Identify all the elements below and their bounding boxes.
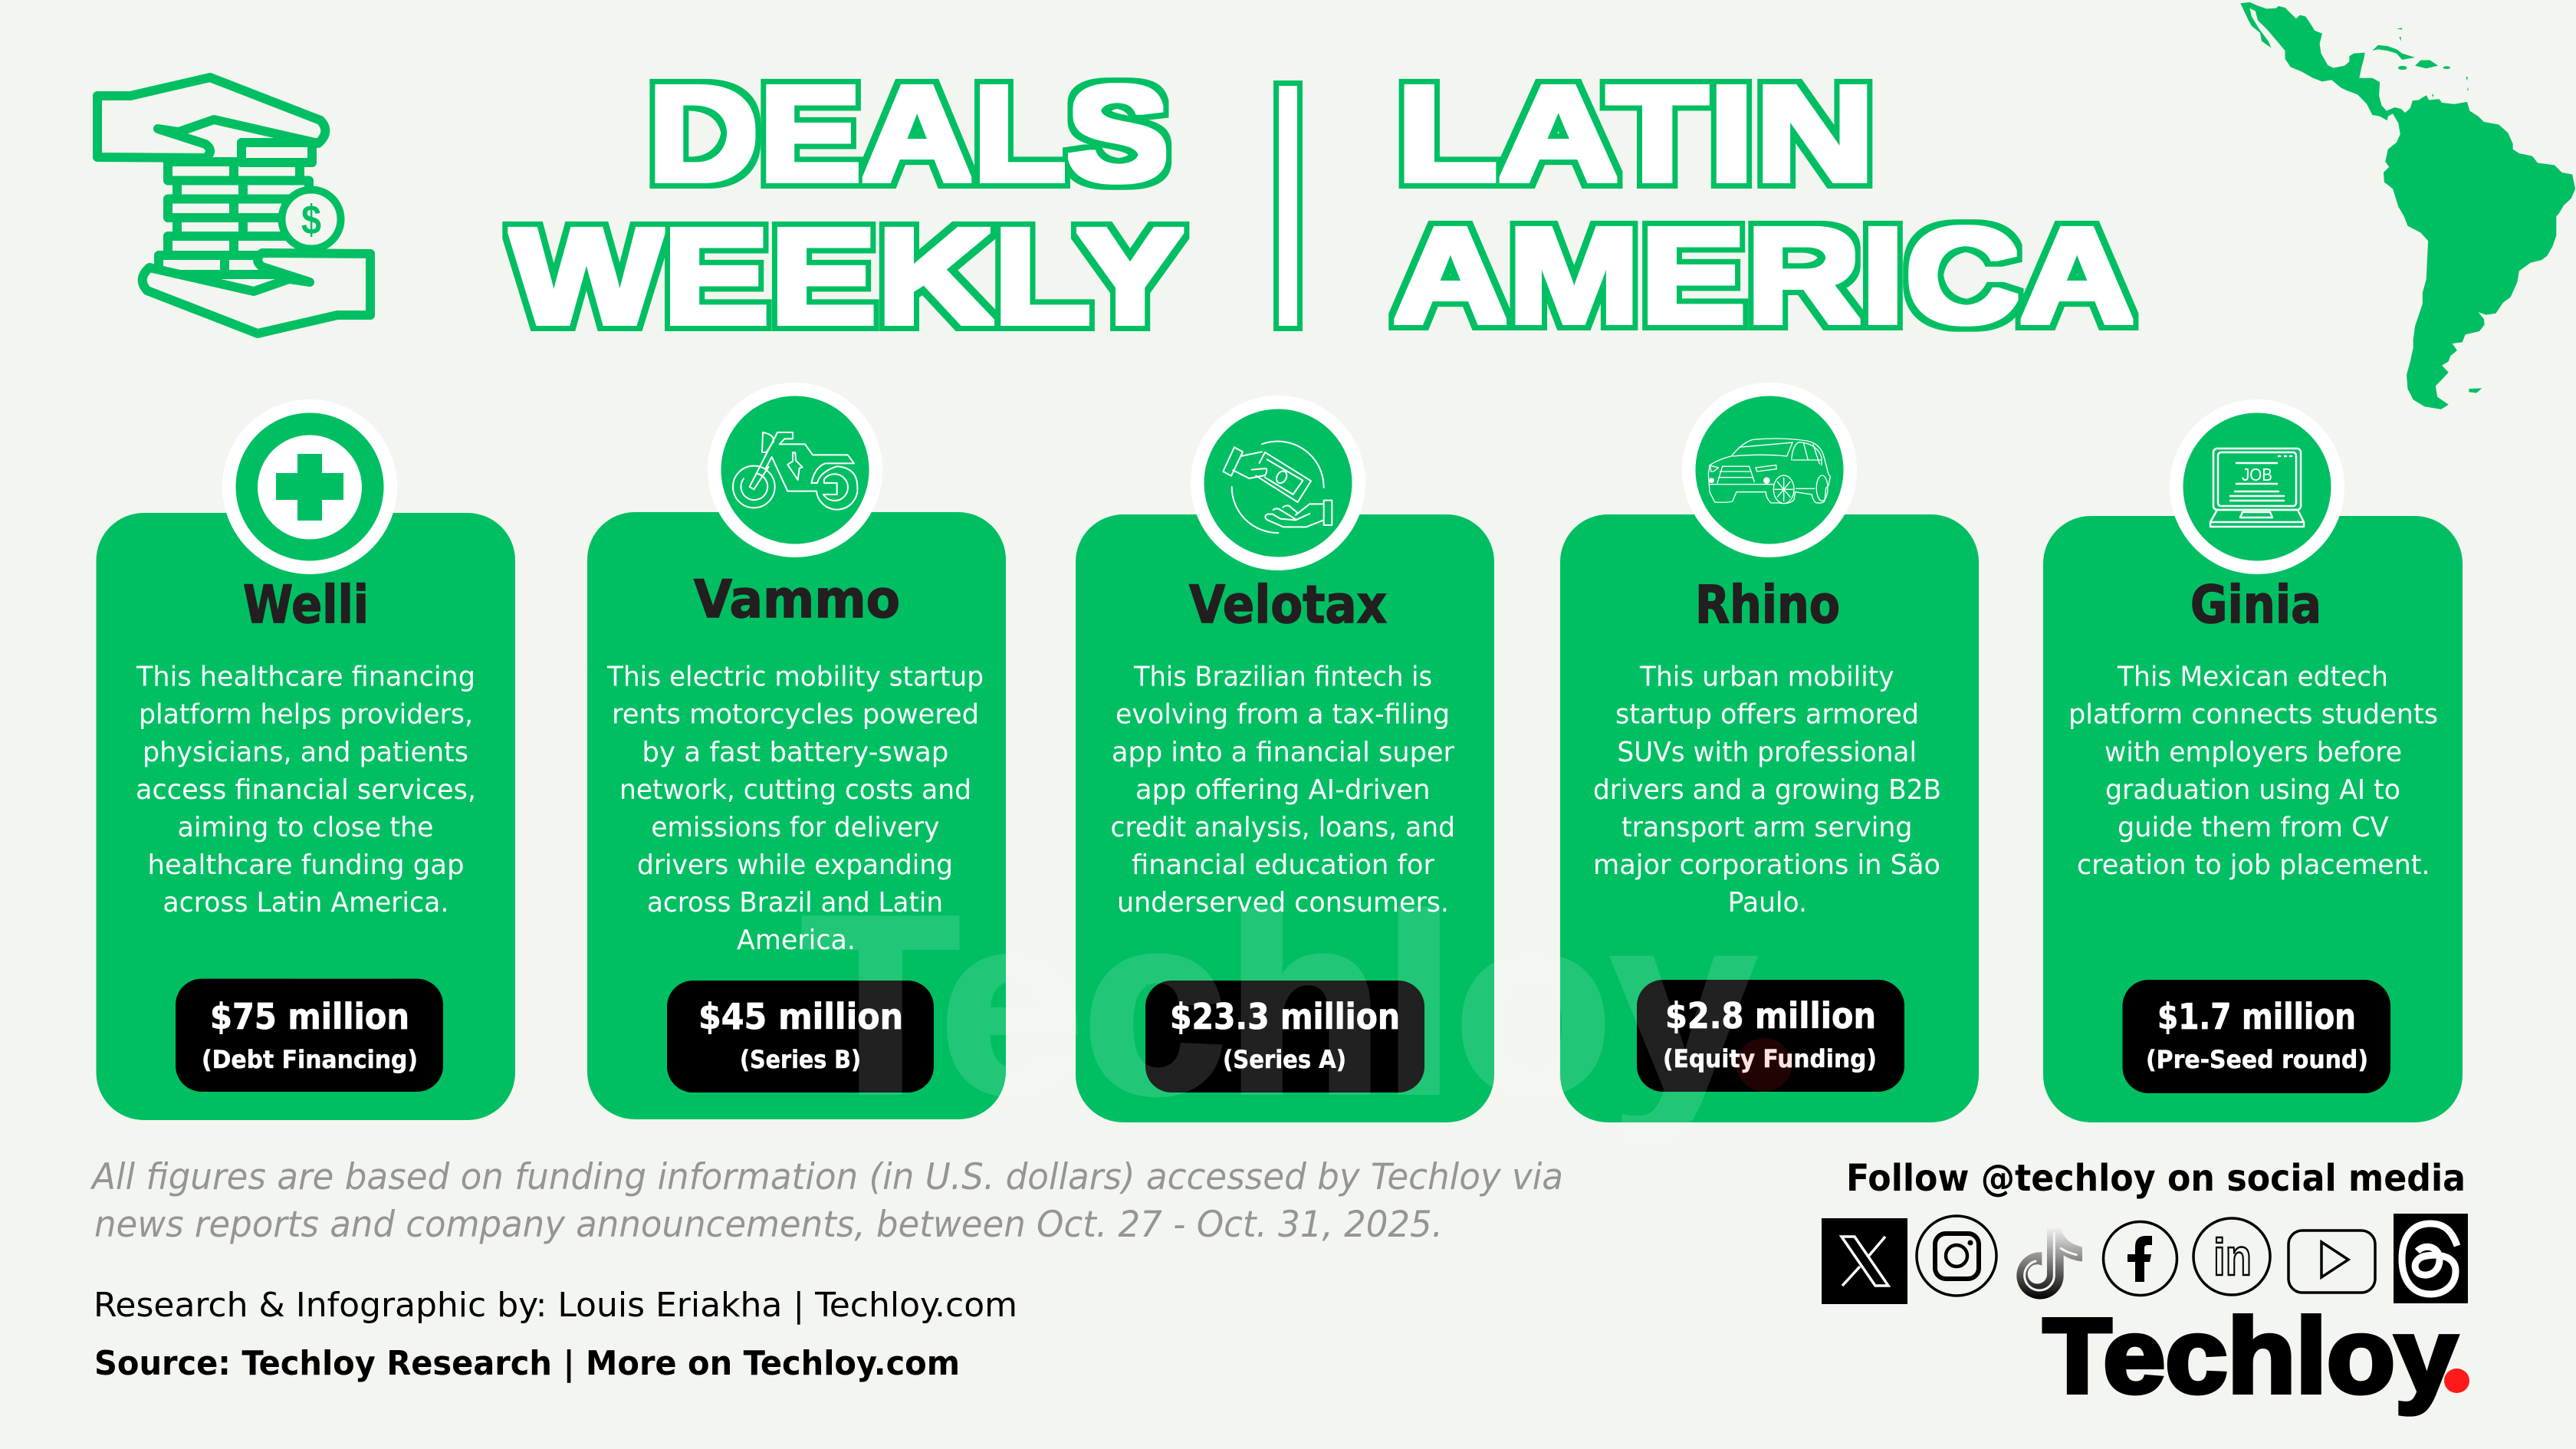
icon: medical cross badge [222, 399, 397, 574]
icon: hands exchanging coins [97, 77, 370, 334]
card background [587, 512, 1006, 1119]
description: aiming to close the [178, 812, 434, 843]
icon: LinkedIn [2193, 1218, 2270, 1295]
title divider [1276, 83, 1300, 328]
description: rents motorcycles powered [612, 699, 979, 731]
icon: Instagram [1917, 1216, 1996, 1296]
funding pill [176, 979, 443, 1092]
description: by a fast battery-swap [642, 737, 948, 768]
footnote: data disclaimer: news reports and company announcements, between Oct. 27 - Oct. 31, 2025. [94, 1204, 1443, 1246]
title: Deals Weekly: LATIN [1396, 59, 1875, 209]
panel: Ginia [2043, 399, 2463, 1122]
description: guide them from CV [2118, 812, 2389, 843]
description [606, 661, 984, 956]
icon: hands exchanging coins: $ [301, 197, 321, 243]
social media heading: Follow @techloy on social media [1846, 1157, 2466, 1200]
panel: Rhino [1560, 383, 1979, 1122]
funding pill: (Series B) [740, 1045, 861, 1074]
description: drivers while expanding [637, 849, 953, 881]
icon: YouTube [2288, 1230, 2375, 1293]
company name: Rhino [1695, 575, 1840, 636]
icon: TikTok [2016, 1227, 2082, 1300]
description: This Brazilian fintech is [1133, 661, 1432, 693]
panel: Vammo [587, 383, 1006, 1119]
description: America. [737, 925, 856, 956]
footnote: data disclaimer [90, 1156, 1563, 1246]
description: graduation using AI to [2105, 774, 2400, 806]
funding pill: $1.7 million [2157, 996, 2356, 1037]
description [136, 661, 476, 918]
description: app offering AI-driven [1135, 774, 1431, 806]
description: across Latin America. [163, 887, 449, 918]
funding pill [667, 981, 934, 1092]
description: across Brazil and Latin [647, 887, 943, 918]
description [1110, 661, 1455, 918]
description: This electric mobility startup [606, 661, 984, 693]
icon: Facebook [2104, 1222, 2177, 1296]
description [2068, 661, 2438, 881]
panel: Welli [97, 399, 515, 1120]
funding pill [2122, 980, 2390, 1093]
card background [1076, 514, 1494, 1122]
map: Latin America [2240, 2, 2575, 409]
description: evolving from a tax-filing [1116, 699, 1450, 731]
icon: LinkedIn: in [2213, 1228, 2252, 1286]
icon: job laptop badge [2170, 399, 2344, 574]
credit line: Research & Infographic by: Louis Eriakha | Techloy.com [94, 1286, 1017, 1325]
description: network, cutting costs and [619, 774, 971, 806]
description: This healthcare financing [136, 661, 475, 693]
funding pill: $75 million [210, 996, 409, 1037]
title: Deals Weekly: WEEKLY [511, 202, 1184, 352]
description: This Mexican edtech [2117, 661, 2388, 693]
description: SUVs with professional [1617, 737, 1917, 768]
description: credit analysis, loans, and [1110, 812, 1455, 843]
footnote: data disclaimer: All figures are based on funding information (in U.S. dollars) accessed by Techloy via [90, 1156, 1563, 1198]
funding pill [1145, 981, 1424, 1092]
description: financial education for [1132, 849, 1434, 881]
card background [1560, 514, 1979, 1122]
company name: Ginia [2190, 575, 2321, 636]
card background [97, 513, 515, 1120]
description: healthcare funding gap [147, 849, 465, 881]
watermark: Techloy: Techloy [802, 864, 1756, 1147]
description: This urban mobility [1639, 661, 1894, 693]
source line: Source: Techloy Research | More on Techloy.com [94, 1344, 960, 1383]
description: major corporations in São [1593, 849, 1940, 881]
title: Deals Weekly [511, 59, 2134, 352]
description: with employers before [2104, 737, 2402, 768]
icon: armored SUV badge [1682, 383, 1857, 557]
icon: job laptop badge: JOB [2242, 465, 2272, 485]
description: platform connects students [2068, 699, 2438, 731]
funding pill: (Pre-Seed round) [2146, 1045, 2368, 1074]
panel: Velotax [1076, 396, 1494, 1122]
logo: Techloy: Techloy [2043, 1297, 2457, 1415]
description: creation to job placement. [2077, 849, 2430, 881]
company name: Welli [243, 575, 369, 636]
funding pill: $23.3 million [1170, 996, 1400, 1037]
funding pill: $2.8 million [1665, 995, 1876, 1037]
funding pill: (Equity Funding) [1663, 1044, 1877, 1073]
icon: X [1822, 1218, 1907, 1304]
funding pill: (Debt Financing) [202, 1045, 418, 1074]
description: transport arm serving [1622, 812, 1912, 843]
icon: money changing hands badge [1191, 396, 1365, 570]
description: access financial services, [136, 774, 476, 806]
icon: Threads [2394, 1214, 2468, 1303]
description: Paulo. [1728, 887, 1807, 918]
description: emissions for delivery [651, 812, 939, 843]
company name: Velotax [1189, 575, 1387, 636]
description: app into a financial super [1112, 737, 1454, 768]
icon: electric motorcycle badge [708, 383, 882, 557]
description: physicians, and patients [143, 737, 468, 768]
title: Deals Weekly: DEALS [648, 59, 1169, 209]
description [1593, 661, 1941, 918]
description: underserved consumers. [1117, 887, 1449, 918]
funding pill: $45 million [698, 996, 903, 1037]
description: platform helps providers, [139, 699, 473, 731]
description: startup offers armored [1615, 699, 1919, 731]
description: drivers and a growing B2B [1593, 774, 1941, 806]
funding pill [1637, 980, 1904, 1092]
title: Deals Weekly: AMERICA [1393, 201, 2134, 351]
funding pill: (Series A) [1223, 1045, 1346, 1074]
card background [2043, 516, 2463, 1122]
company name: Vammo [694, 570, 900, 630]
